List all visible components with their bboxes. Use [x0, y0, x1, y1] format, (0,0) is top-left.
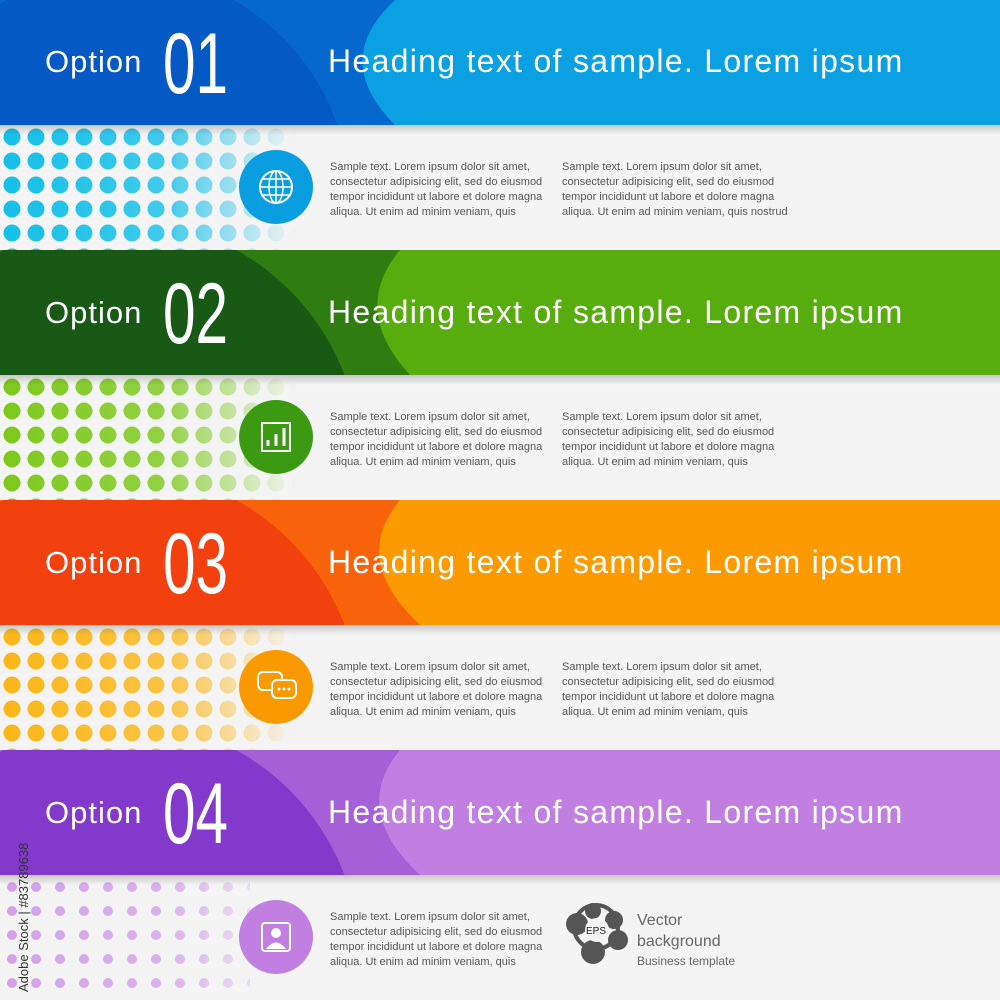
option label 3: 03 [163, 515, 228, 612]
text block 3: tempor incididunt ut labore et dolore magna [330, 691, 543, 703]
text block 4: Sample text. Lorem ipsum dolor sit amet, [330, 911, 530, 923]
text block 3 [330, 661, 775, 718]
text: vector background: Business template [637, 954, 735, 968]
option label 4 [45, 765, 228, 862]
text block 4: consectetur adipisicing elit, sed do eiusmod [330, 926, 542, 938]
text block 1: tempor incididunt ut labore et dolore magna [562, 191, 775, 203]
option label 1 [45, 15, 228, 112]
side watermark text: Adobe Stock | #83789638 [16, 843, 31, 992]
text block 2: Sample text. Lorem ipsum dolor sit amet, [330, 411, 530, 423]
option label 2: 02 [163, 265, 228, 362]
panel 2 [0, 375, 1000, 500]
band 3 header [0, 500, 1000, 625]
option label 2: Option [45, 295, 142, 330]
text block 2: aliqua. Ut enim ad minim veniam, quis [562, 456, 748, 468]
text block 3: tempor incididunt ut labore et dolore magna [562, 691, 775, 703]
text block 3: aliqua. Ut enim ad minim veniam, quis [330, 706, 516, 718]
text block 2: consectetur adipisicing elit, sed do eiusmod [330, 426, 542, 438]
option label 1: Option [45, 44, 142, 79]
text block 2: Sample text. Lorem ipsum dolor sit amet, [562, 411, 762, 423]
option label 2 [45, 265, 228, 362]
text block 2: aliqua. Ut enim ad minim veniam, quis [330, 456, 516, 468]
heading 2: Heading text of sample. Lorem ipsum [328, 294, 904, 330]
text block 1: tempor incididunt ut labore et dolore magna [330, 191, 543, 203]
text block 1: Sample text. Lorem ipsum dolor sit amet, [562, 161, 762, 173]
text: vector background: Vector [637, 912, 683, 929]
panel 1 [0, 125, 1000, 250]
text block 3: consectetur adipisicing elit, sed do eiusmod [330, 676, 542, 688]
text block 4 [330, 911, 543, 968]
heading 3: Heading text of sample. Lorem ipsum [328, 544, 904, 580]
option label 4: Option [45, 795, 142, 830]
band 2 header [0, 250, 1000, 375]
text block 1 [330, 161, 788, 218]
text block 1: consectetur adipisicing elit, sed do eiusmod [562, 176, 774, 188]
panel 4 [0, 875, 1000, 1000]
text block 1: aliqua. Ut enim ad minim veniam, quis [330, 206, 516, 218]
text block 3: Sample text. Lorem ipsum dolor sit amet, [562, 661, 762, 673]
text block 1: consectetur adipisicing elit, sed do eiusmod [330, 176, 542, 188]
option label 1: 01 [163, 15, 228, 112]
text block 3: consectetur adipisicing elit, sed do eiusmod [562, 676, 774, 688]
icon: globe [239, 150, 313, 224]
text block 4: aliqua. Ut enim ad minim veniam, quis [330, 956, 516, 968]
text block 3: Sample text. Lorem ipsum dolor sit amet, [330, 661, 530, 673]
option label 3 [45, 515, 228, 612]
heading 4: Heading text of sample. Lorem ipsum [328, 794, 904, 830]
text: vector background: background [637, 933, 721, 950]
band 4 header [0, 750, 1000, 875]
icon: chart [239, 400, 313, 474]
heading 1: Heading text of sample. Lorem ipsum [328, 43, 904, 79]
text block 2: tempor incididunt ut labore et dolore magna [330, 441, 543, 453]
option label 3: Option [45, 545, 142, 580]
text block 2 [330, 411, 775, 468]
icon: EPS logo [566, 903, 628, 964]
text block 1: Sample text. Lorem ipsum dolor sit amet, [330, 161, 530, 173]
band 1 header [0, 0, 1000, 125]
text block 2: tempor incididunt ut labore et dolore magna [562, 441, 775, 453]
text block 3: aliqua. Ut enim ad minim veniam, quis [562, 706, 748, 718]
icon: user [239, 900, 313, 974]
text block 1: aliqua. Ut enim ad minim veniam, quis nostrud [562, 206, 788, 218]
icon: chat [239, 650, 313, 724]
option label 4: 04 [163, 765, 228, 862]
panel 3 [0, 625, 1000, 750]
icon: EPS logo: EPS [586, 926, 606, 937]
text block 2: consectetur adipisicing elit, sed do eiusmod [562, 426, 774, 438]
text: vector background [637, 912, 735, 968]
text block 4: tempor incididunt ut labore et dolore magna [330, 941, 543, 953]
